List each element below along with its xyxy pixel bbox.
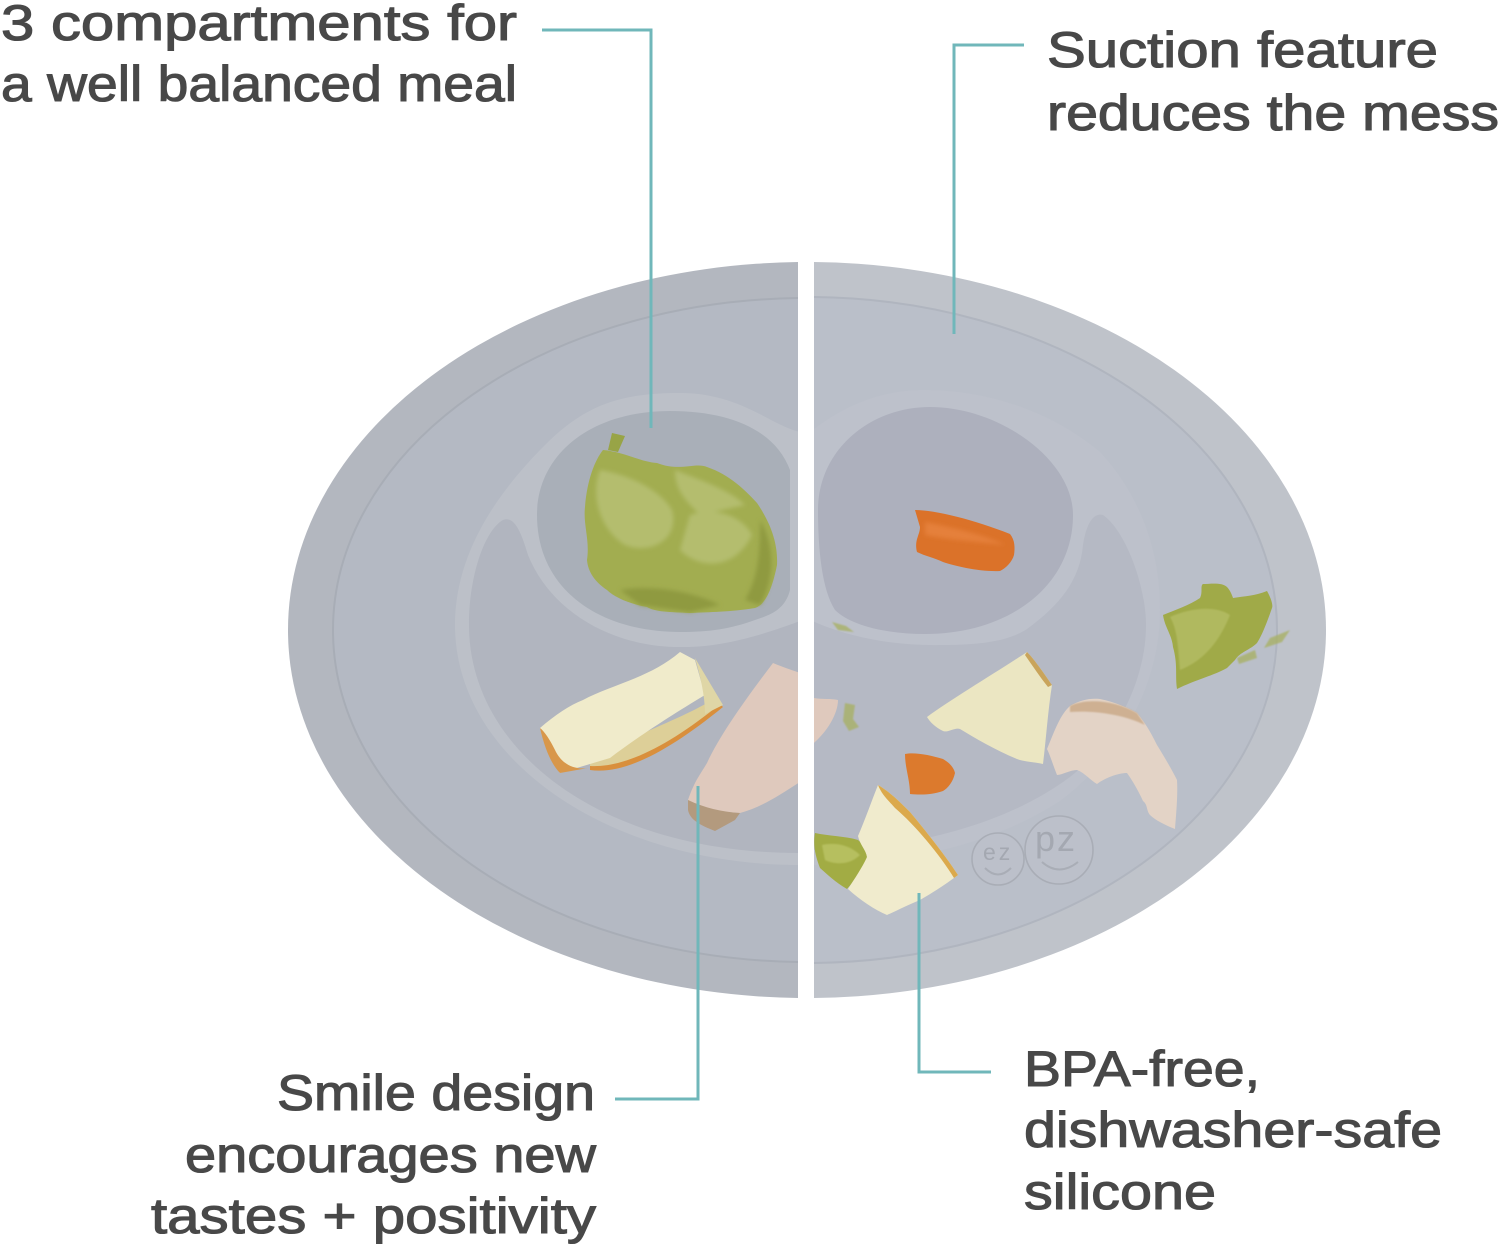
- suction rim: [814, 296, 1278, 964]
- food: avocado smear: [1163, 584, 1272, 689]
- mat outer: [814, 262, 1326, 998]
- heading text: silicone: [1024, 1164, 1216, 1220]
- food: cheese wedge: [848, 785, 958, 915]
- heading text: [151, 1065, 597, 1244]
- food: turkey piece: [1047, 699, 1177, 829]
- food: avocado specks: [832, 622, 1290, 731]
- heading text: BPA-free,: [1024, 1041, 1260, 1097]
- heading text: [1024, 1041, 1442, 1220]
- food: avocado dab: [814, 833, 867, 889]
- food: right part of turkey roll: [814, 698, 838, 743]
- heading text: tastes + positivity: [151, 1188, 596, 1244]
- food: cheese roll: [540, 652, 723, 773]
- plate: left half: [288, 262, 798, 998]
- heading text: dishwasher-safe: [1024, 1102, 1442, 1158]
- smile tray rim: [455, 393, 800, 865]
- heading text: Smile design: [277, 1065, 595, 1121]
- logo: ez pz: ez: [983, 839, 1013, 865]
- right bowl: [818, 407, 1073, 634]
- heading text: [1, 0, 517, 112]
- food: avocado mash: [585, 433, 777, 613]
- smile cavity: [949, 520, 1144, 832]
- logo: ez pz: [972, 816, 1093, 885]
- heading text: Suction feature: [1047, 22, 1438, 78]
- smile cavity: [469, 519, 800, 853]
- heading text: encourages new: [185, 1127, 597, 1183]
- mat outer: [288, 262, 798, 998]
- callout: material: [919, 893, 1442, 1220]
- logo: ez pz: pz: [1035, 818, 1077, 859]
- left bowl: [537, 411, 790, 632]
- suction rim: [332, 297, 798, 963]
- heading text: a well balanced meal: [1, 56, 517, 112]
- leader line: [954, 45, 1024, 334]
- callout: compartments: [1, 0, 651, 428]
- leader line: [919, 893, 991, 1072]
- leader line: [615, 786, 698, 1099]
- food: turkey roll: [688, 663, 800, 831]
- food: cheese slice: [927, 652, 1052, 764]
- smile tray rim: [810, 390, 1160, 865]
- leader line: [542, 30, 651, 428]
- avocado highlights: [596, 470, 752, 564]
- heading text: reduces the mess: [1047, 85, 1499, 141]
- heading text: [1047, 22, 1499, 141]
- plate: right half: [814, 262, 1326, 998]
- food: carrot: [915, 510, 1015, 571]
- callout: smile design: [151, 786, 698, 1244]
- callout: suction: [954, 22, 1499, 334]
- food: small carrot: [905, 753, 955, 795]
